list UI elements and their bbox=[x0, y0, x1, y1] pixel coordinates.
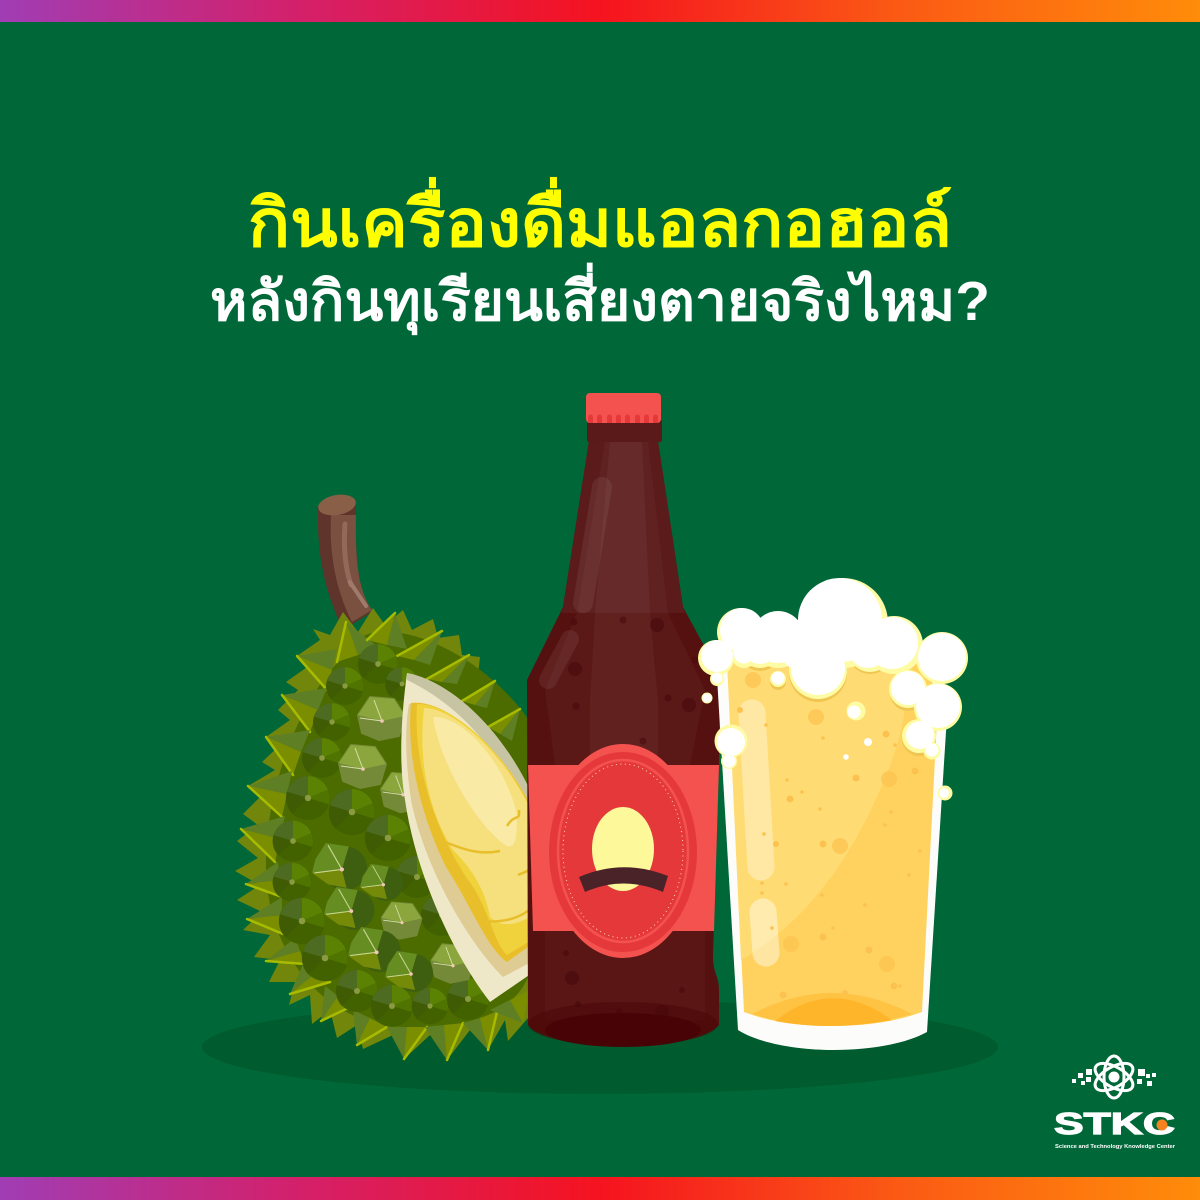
title: white subheading: หลังกินทุเรียนเสี่ยงตายจริงไหม? bbox=[210, 262, 990, 336]
durian back spikes bbox=[235, 608, 535, 1060]
bottle base shadow bbox=[528, 1002, 718, 1046]
durian front spikes bbox=[241, 613, 530, 1060]
bottle neck band bbox=[587, 420, 662, 442]
bottle bubbles bbox=[563, 616, 698, 1026]
beer lighter area bbox=[727, 660, 905, 960]
bottle inner light bands bbox=[545, 441, 705, 765]
bottle glass bbox=[527, 441, 720, 1046]
beer highlights bbox=[752, 713, 761, 867]
durian body bbox=[266, 632, 535, 1028]
durian stem bbox=[317, 492, 372, 630]
durian flesh segment bbox=[401, 673, 535, 1002]
beer liquid bbox=[727, 660, 938, 1026]
glass bbox=[716, 660, 948, 1050]
icon: beer glass bbox=[698, 578, 968, 1050]
durian knobs bbox=[273, 644, 489, 1027]
bottle label bbox=[528, 744, 719, 958]
ground shadow bbox=[202, 1000, 998, 1094]
foam halo bbox=[698, 578, 968, 800]
icon: durian bbox=[235, 492, 535, 1060]
logo tagline: Science and Technology Knowledge Center bbox=[1055, 1144, 1176, 1150]
beer bottom tint bbox=[752, 993, 912, 1026]
bottle highlights bbox=[583, 487, 602, 603]
bottle cap bbox=[586, 393, 661, 423]
top gradient bar bbox=[0, 0, 1200, 22]
beer bubbles bbox=[737, 672, 922, 998]
icon: beer bottle bbox=[527, 393, 720, 1047]
bottom gradient bar bbox=[0, 1177, 1200, 1200]
logo pixel squares bbox=[1072, 1069, 1156, 1086]
logo: STKC bbox=[1054, 1056, 1176, 1150]
title: yellow headline: กินเครื่องดื่มแอลกอฮอล์ bbox=[248, 176, 952, 260]
logo wordmark: STKC bbox=[1054, 1106, 1175, 1141]
foam bubbles bbox=[701, 578, 966, 798]
logo atom icon bbox=[1091, 1056, 1137, 1098]
bottle upper tint bbox=[561, 441, 685, 613]
logo orange dot bbox=[1156, 1120, 1168, 1130]
foam shadow bbox=[739, 629, 936, 756]
